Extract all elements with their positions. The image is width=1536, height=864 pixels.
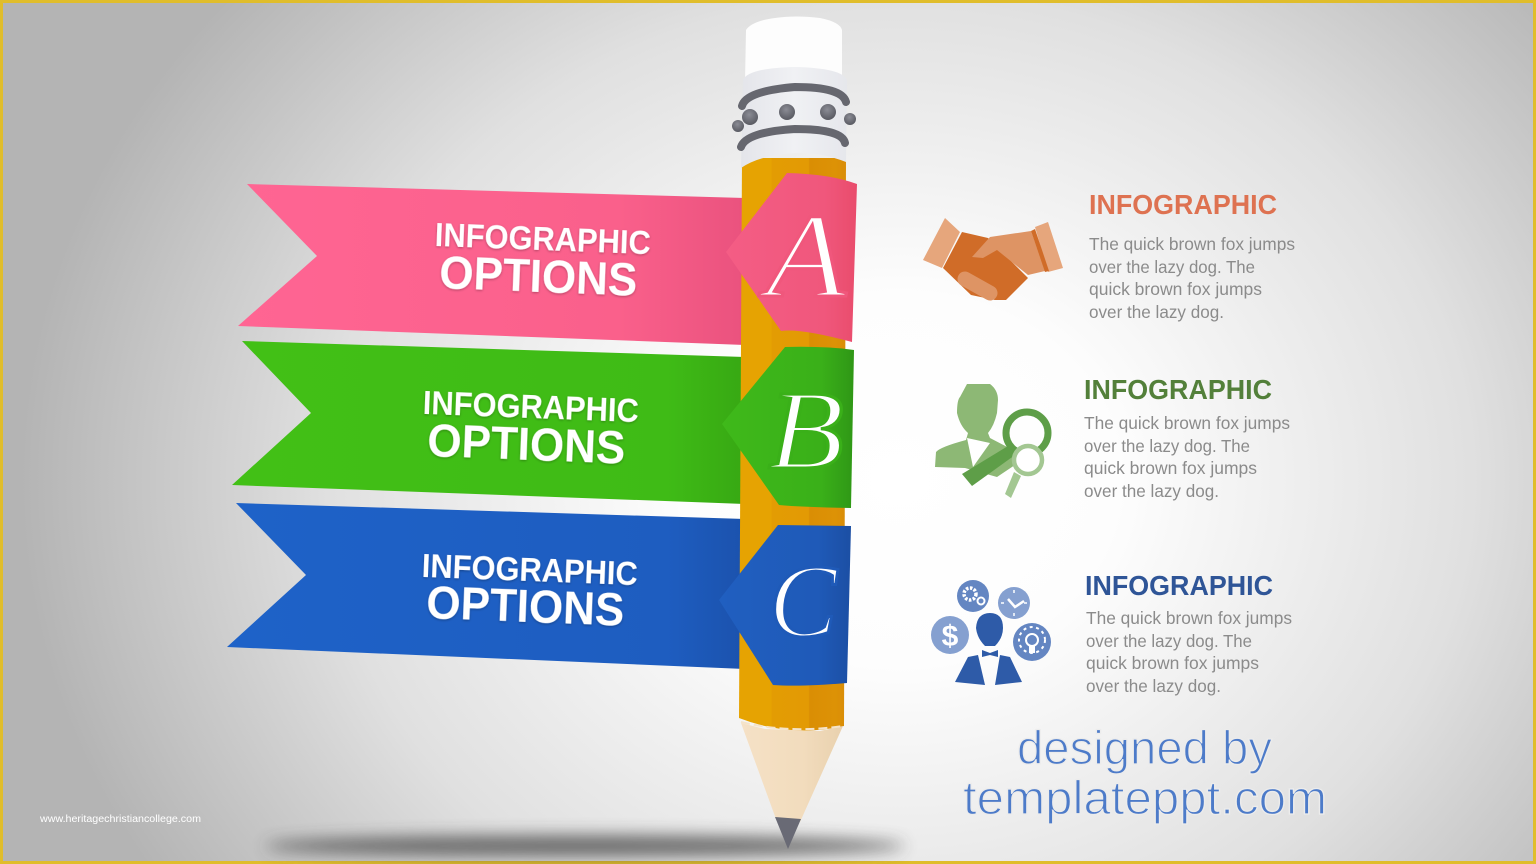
pencil wood tip xyxy=(741,723,843,822)
heading and text: item 2: over the lazy dog. xyxy=(1084,481,1219,501)
icon: handshake xyxy=(923,218,1063,300)
ribbon: blue xyxy=(227,503,745,669)
icon: person with magnifiers xyxy=(935,384,1048,498)
bubble: dollar xyxy=(931,616,969,654)
heading and text: item 3: quick brown fox jumps xyxy=(1086,653,1259,673)
heading and text: item 3: INFOGRAPHIC xyxy=(1085,570,1273,601)
heading and text: item 1: quick brown fox jumps xyxy=(1089,279,1262,299)
heading and text: item 2: quick brown fox jumps xyxy=(1084,458,1257,478)
heading and text: item 3: over the lazy dog. The xyxy=(1086,631,1252,651)
pencil graphite point xyxy=(775,817,801,849)
heading and text: item 2 xyxy=(1084,374,1290,501)
bubble: gears xyxy=(957,580,989,612)
ferrule bands xyxy=(741,87,846,147)
heading and text: item 3: over the lazy dog. xyxy=(1086,676,1221,696)
watermark url: www.heritagechristiancollege.com xyxy=(39,814,201,825)
heading and text: item 3: The quick brown fox jumps xyxy=(1086,608,1292,628)
pencil tab: green xyxy=(722,347,854,508)
bubble: light bulb xyxy=(1013,623,1051,661)
pencil ferrule xyxy=(741,67,847,168)
ribbon label: blue xyxy=(419,547,638,636)
heading and text: item 3 xyxy=(1085,570,1292,696)
ribbon label: green: INFOGRAPHIC xyxy=(422,384,639,429)
ribbon label: pink xyxy=(432,216,651,306)
designed by credit: templateppt.com xyxy=(963,771,1327,824)
ribbon label: blue: INFOGRAPHIC xyxy=(421,547,638,592)
pencil body xyxy=(739,158,846,730)
ribbon label: pink: OPTIONS xyxy=(438,246,638,306)
icon: businessman with concept bubbles xyxy=(931,580,1051,685)
ribbon label: pink: INFOGRAPHIC xyxy=(434,216,651,261)
pencil eraser xyxy=(745,16,842,82)
designed by credit: designed by xyxy=(1017,721,1272,774)
heading and text: item 2: The quick brown fox jumps xyxy=(1084,413,1290,433)
pencil ground shadow xyxy=(265,835,905,857)
heading and text: item 1: INFOGRAPHIC xyxy=(1089,189,1277,220)
ribbon label: green: OPTIONS xyxy=(426,414,626,474)
ribbon: green xyxy=(232,341,745,504)
letter C: C xyxy=(769,544,839,659)
ribbon: pink xyxy=(238,184,745,345)
designed by credit xyxy=(963,721,1327,824)
businessman silhouette xyxy=(976,613,1003,646)
ribbon label: blue: OPTIONS xyxy=(425,576,625,636)
heading and text: item 1 xyxy=(1089,189,1295,322)
heading and text: item 1: over the lazy dog. xyxy=(1089,302,1224,322)
ribbon label: green xyxy=(420,384,639,474)
letter B: B xyxy=(768,369,844,493)
bubble: clock xyxy=(998,587,1030,619)
letter A: A xyxy=(758,189,847,322)
heading and text: item 2: INFOGRAPHIC xyxy=(1084,374,1272,405)
pencil tab: pink xyxy=(726,173,857,342)
ferrule rivets xyxy=(732,104,856,132)
pencil xyxy=(732,16,856,849)
icon: businessman with concept bubbles: $ xyxy=(942,620,959,653)
heading and text: item 2: over the lazy dog. The xyxy=(1084,436,1250,456)
heading and text: item 1: The quick brown fox jumps xyxy=(1089,234,1295,254)
heading and text: item 1: over the lazy dog. The xyxy=(1089,257,1255,277)
pencil tab: blue xyxy=(719,525,851,686)
